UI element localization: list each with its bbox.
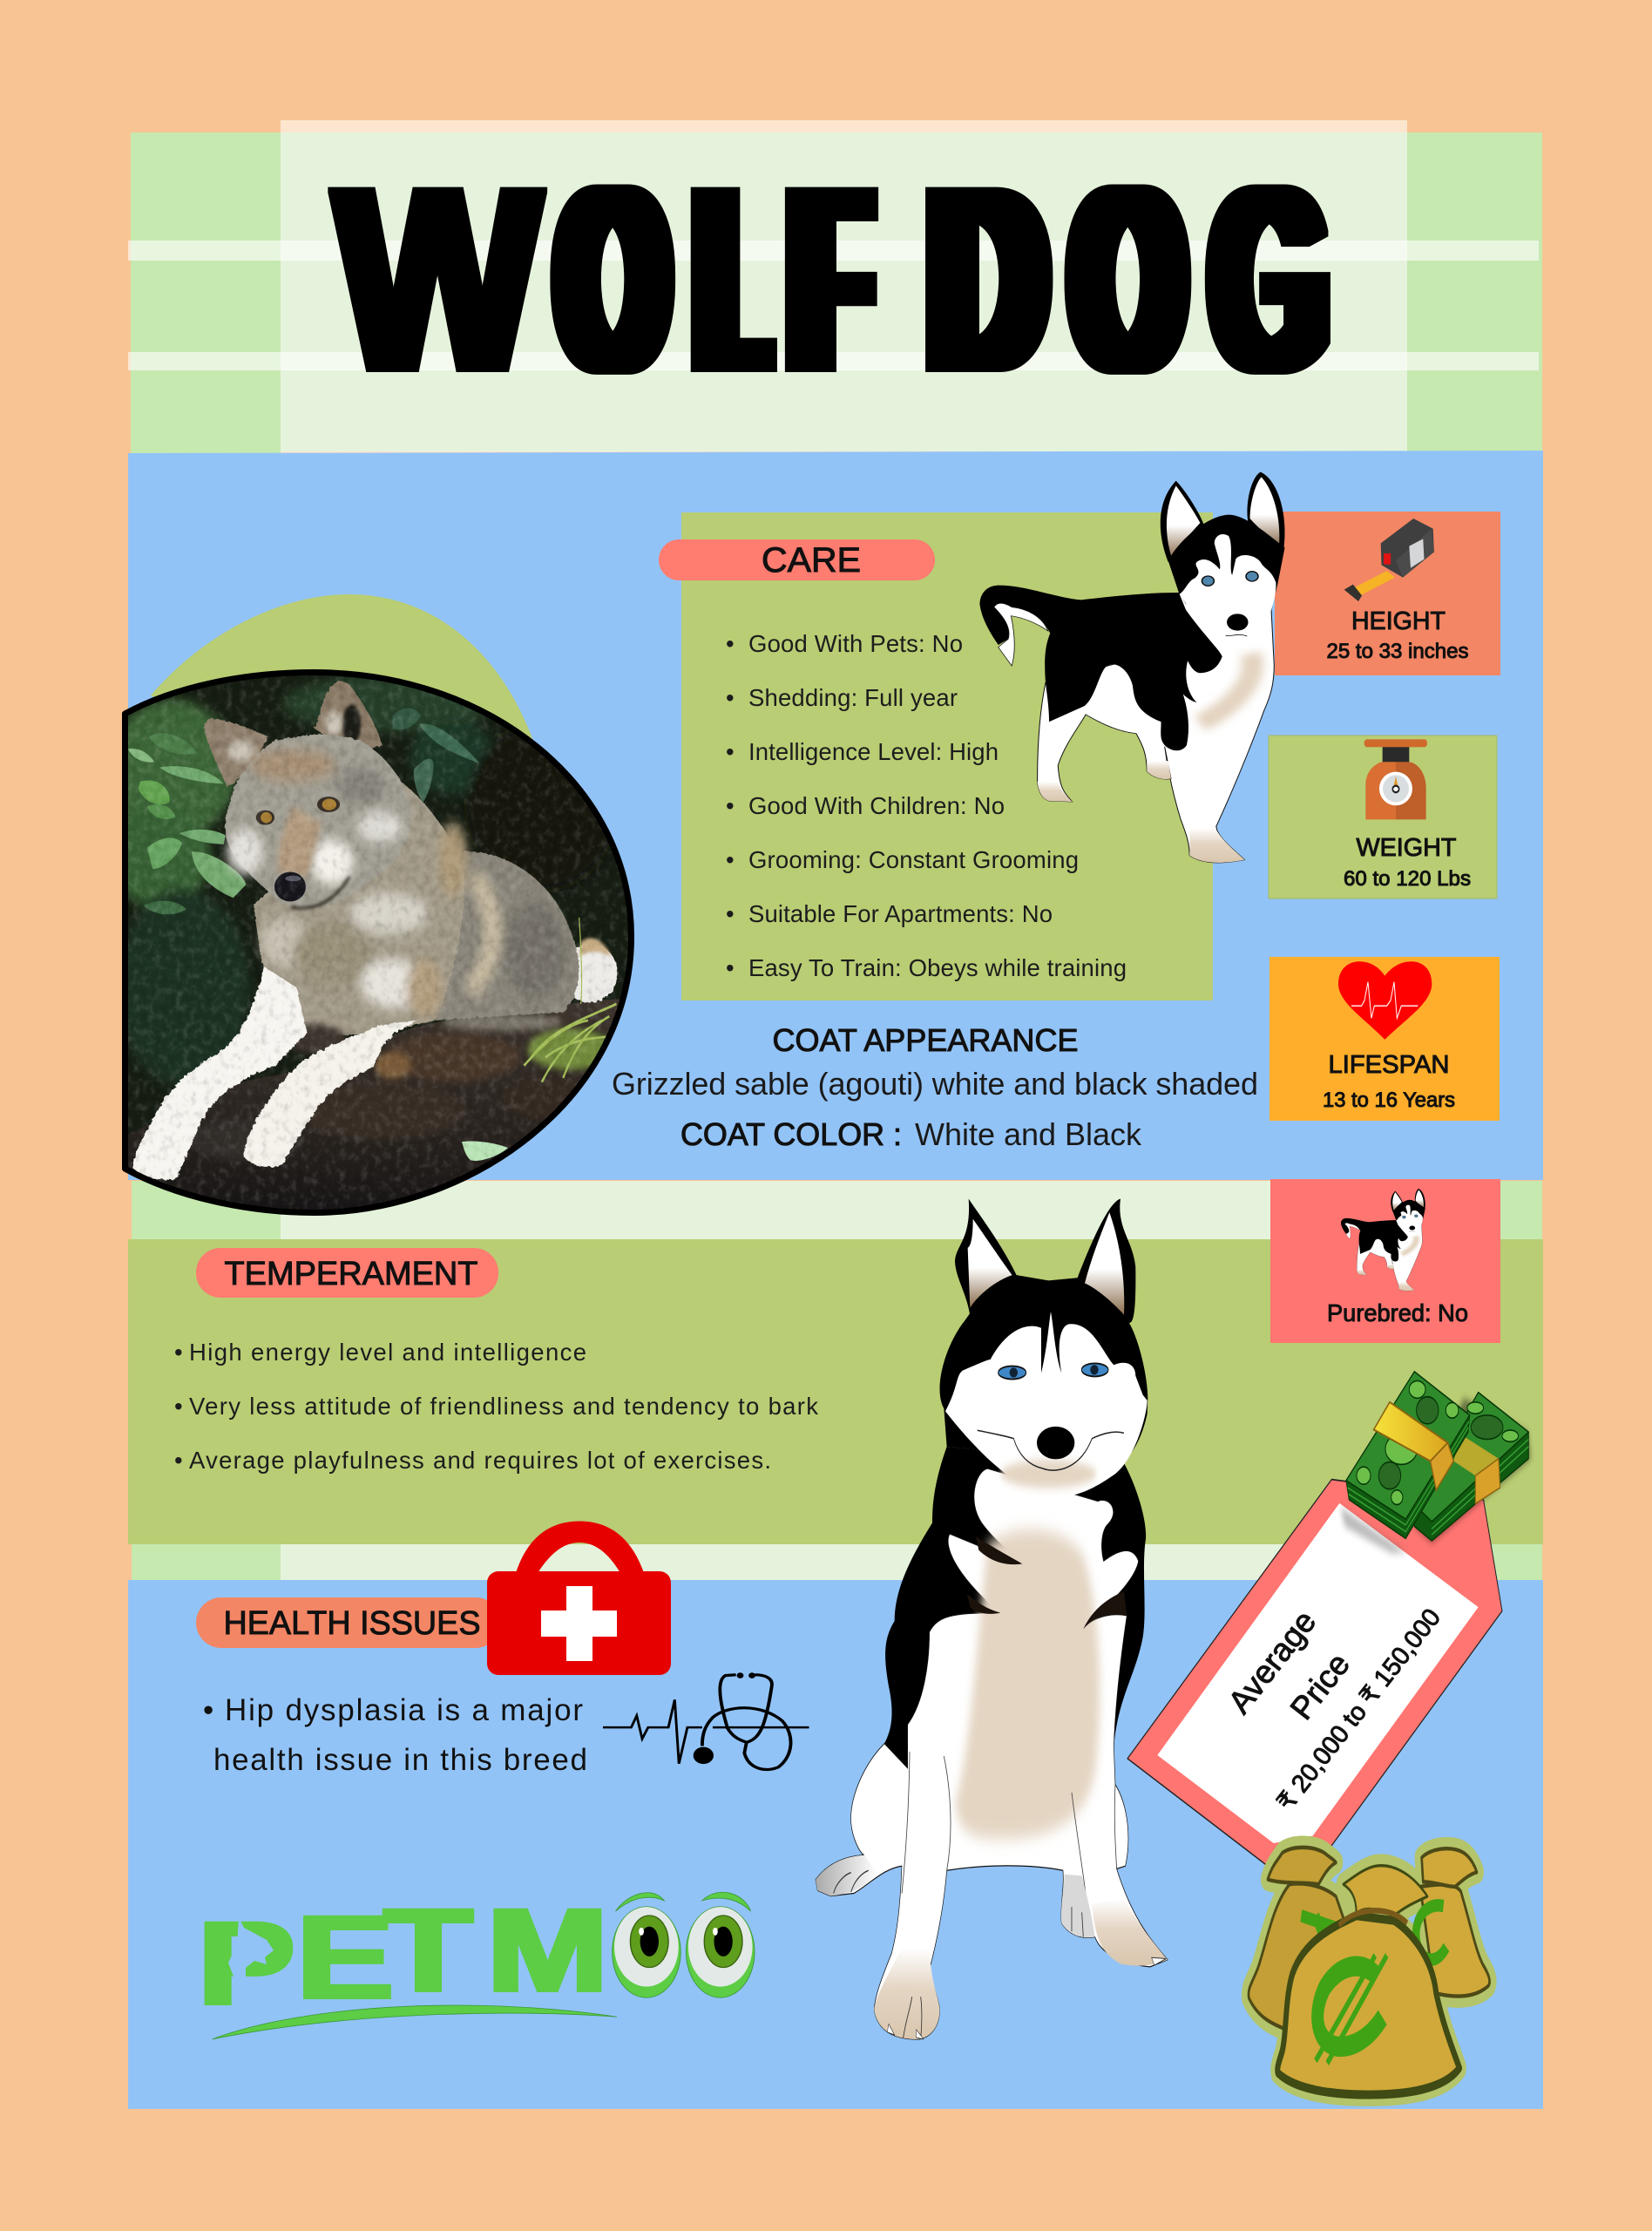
temperament list: High energy level and intelligence <box>189 1339 586 1366</box>
panel: purebred <box>1270 1179 1500 1343</box>
care list: • <box>726 738 735 765</box>
middle light band <box>281 1181 1407 1582</box>
logo wordmark: PETM <box>198 1884 608 2031</box>
upper blue panel <box>128 451 1543 1180</box>
price tag: ₹ 20,000 to ₹ 150,000 <box>1272 1604 1446 1816</box>
poster <box>122 120 1543 2109</box>
rear left bag <box>1249 1848 1348 2031</box>
icon: scale <box>1364 739 1427 819</box>
panel: health issues heading: HEALTH ISSUES <box>223 1605 481 1642</box>
illustration: standing husky <box>979 472 1285 863</box>
rear stack <box>1414 1393 1528 1541</box>
title: F <box>795 132 865 425</box>
coat description: White and Black <box>915 1116 1142 1152</box>
title: O <box>1074 132 1181 425</box>
care list: • <box>726 792 735 819</box>
panel: weight: WEIGHT <box>1356 834 1457 862</box>
panel: health issues heading <box>196 1597 501 1648</box>
price tag: Price <box>1283 1646 1357 1726</box>
care list: • <box>726 846 735 873</box>
leg outlines <box>902 1752 1117 1909</box>
wolf photo <box>122 669 634 1216</box>
care list: Easy To Train: Obeys while training <box>748 954 1127 981</box>
icon: mini husky <box>1341 1189 1425 1291</box>
eyes <box>999 1366 1026 1379</box>
icon: tape measure <box>1344 519 1434 601</box>
temperament list: Very less attitude of friendliness and tendency to bark <box>189 1393 818 1420</box>
price tag <box>1127 1480 1502 1865</box>
care list: • <box>726 684 735 711</box>
icon: money bags <box>1249 1848 1490 2095</box>
temperament olive panel <box>128 1239 1543 1544</box>
tag shape <box>1127 1480 1502 1865</box>
care list: Good With Pets: No <box>748 630 963 657</box>
illustration: sitting husky <box>816 1199 1168 2039</box>
care list: Suitable For Apartments: No <box>748 900 1053 927</box>
olive blob behind wolf <box>151 594 533 784</box>
tag text: Average <box>1222 1604 1323 1720</box>
wolf eyes <box>256 810 274 825</box>
temperament list: • <box>174 1393 183 1420</box>
wolf body <box>254 774 579 1034</box>
leaves <box>192 851 246 898</box>
panel: lifespan: LIFESPAN <box>1328 1051 1450 1079</box>
temperament list <box>174 1339 818 1474</box>
head <box>940 1275 1148 1463</box>
foliage <box>105 675 617 1086</box>
wolf legs <box>132 967 417 1180</box>
care heading pill <box>659 539 935 580</box>
temperament list: • <box>174 1447 183 1474</box>
temperament list: Average playfulness and requires lot of exercises. <box>189 1447 771 1474</box>
black coat <box>884 1447 1146 1768</box>
title: L <box>701 132 763 425</box>
panel: weight <box>1269 736 1497 899</box>
front bag <box>1277 1866 1459 2095</box>
panel: lifespan <box>1269 957 1500 1121</box>
white body <box>816 1468 1168 2039</box>
panel: height: 25 to 33 inches <box>1326 640 1469 663</box>
panel: temperament heading <box>196 1248 498 1298</box>
care list: Good With Children: No <box>748 792 1005 819</box>
rear right bag <box>1420 1848 1490 1997</box>
panel: temperament heading: TEMPERAMENT <box>225 1256 477 1292</box>
title stripes <box>128 241 1539 370</box>
logo dog cutout <box>228 1917 274 1990</box>
panel: lifespan: 13 to 16 Years <box>1323 1088 1455 1112</box>
coat description: COAT APPEARANCE <box>772 1022 1079 1058</box>
front stack <box>1346 1372 1470 1538</box>
panel: height: HEIGHT <box>1351 607 1446 635</box>
coat description <box>612 1022 1258 1152</box>
care list: Grooming: Constant Grooming <box>748 846 1079 873</box>
panel: weight: 60 to 120 Lbs <box>1344 867 1471 891</box>
care list: • <box>726 630 735 657</box>
green cent sign front <box>1316 1956 1387 2064</box>
muzzle shading <box>1000 1460 1096 1488</box>
temperament list: • <box>174 1339 183 1366</box>
icon: money stacks <box>1346 1372 1531 1543</box>
green cent signs rear <box>1301 1905 1446 1960</box>
care list: • <box>726 900 735 927</box>
pale leaf <box>462 1141 508 1161</box>
wolf frame <box>125 673 631 1213</box>
chest shading <box>956 1529 1100 1839</box>
icon: heart <box>1338 961 1432 1040</box>
wolf head <box>225 735 410 908</box>
logo swoosh and eyes <box>213 1892 755 2039</box>
title: O <box>560 132 666 425</box>
artwork canvas <box>122 120 1543 2109</box>
panel: height <box>1275 512 1500 675</box>
care heading pill: CARE <box>762 541 861 580</box>
care list: • <box>726 954 735 981</box>
face <box>945 1312 1148 1497</box>
wolf nose and mouth <box>274 871 306 901</box>
grass <box>528 1028 613 1070</box>
paws <box>874 1948 939 2039</box>
top green backdrop <box>131 132 1542 453</box>
title: G <box>1213 132 1325 425</box>
fur spikes <box>967 1536 1127 1629</box>
coat description: COAT COLOR : <box>680 1116 902 1152</box>
care list <box>726 630 1127 981</box>
shadow between legs <box>282 1025 346 1054</box>
title light panel <box>281 120 1407 453</box>
photo background <box>128 675 628 1135</box>
coat description: Grizzled sable (agouti) white and black shaded <box>612 1066 1258 1102</box>
icon: first aid kit <box>487 1522 671 1675</box>
care list: Intelligence Level: High <box>748 738 999 765</box>
health text: health issue in this breed <box>213 1743 587 1777</box>
rock <box>128 999 620 1210</box>
health text: Hip dysplasia is a major <box>225 1693 583 1727</box>
middle green band <box>132 1181 1542 1582</box>
toes <box>834 1870 1083 2039</box>
halo <box>1249 1848 1490 2095</box>
title: W <box>335 132 539 425</box>
lower blue panel <box>128 1580 1543 2109</box>
nose <box>1037 1427 1074 1459</box>
title <box>328 132 1330 425</box>
logo: PETMOO <box>198 1884 755 2039</box>
wolf ears <box>204 682 382 788</box>
panel: care <box>659 512 1213 1000</box>
icon: stethoscope with heartbeat <box>603 1672 809 1769</box>
panel: purebred: Purebred: No <box>1327 1299 1468 1326</box>
health text <box>203 1693 587 1777</box>
wolf tail <box>562 944 618 1003</box>
health text: • <box>203 1693 213 1727</box>
ears <box>955 1199 1017 1316</box>
title: D <box>931 132 1044 425</box>
care list: Shedding: Full year <box>748 684 958 711</box>
